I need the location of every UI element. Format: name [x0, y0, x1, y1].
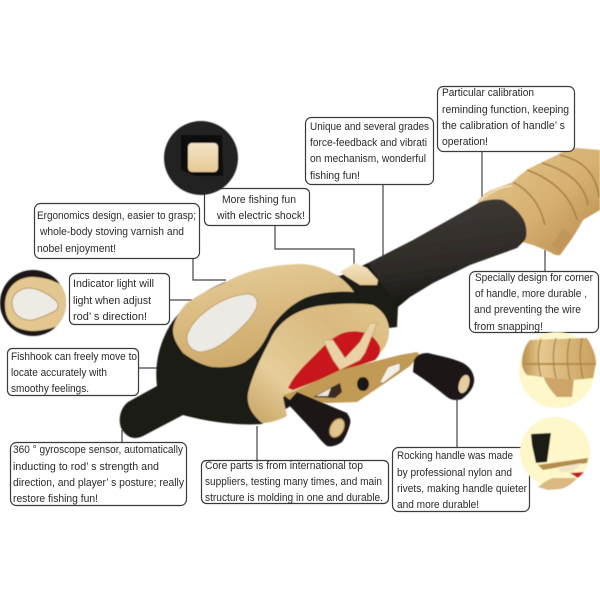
- crank arm black rivet: [357, 377, 369, 391]
- gold wedge on body: [340, 263, 378, 285]
- callout: fishhook: smoothy feelings.: [11, 383, 89, 395]
- callout: electric shock: [204, 188, 310, 226]
- callout: ergonomics: Ergonomics design, easier to grasp;: [37, 210, 196, 222]
- callout: calibration: operation!: [442, 136, 488, 148]
- reel body and tail rod: [120, 263, 398, 438]
- callout: force feedback: Unique and several grades: [310, 121, 429, 133]
- callout: gyroscope: inducting to rod’ s strength and: [13, 461, 159, 473]
- callout: calibration: the calibration of handle’ s: [442, 120, 565, 132]
- callout: indicator light: [70, 274, 170, 324]
- callout: core parts: structure is molding in one and durable.: [205, 492, 383, 504]
- callout: force feedback: force-feedback and vibrati: [310, 137, 427, 149]
- callout: calibration: [438, 86, 574, 152]
- callout: handle corner: [470, 272, 598, 333]
- red reel disc: [288, 331, 380, 390]
- inset: ribbed handle end: [519, 332, 596, 408]
- callout: handle corner: and preventing the wire: [474, 304, 581, 316]
- connector lines: [122, 151, 545, 460]
- gold crank arm: [283, 352, 420, 403]
- callout: electric shock: More fishing fun: [222, 194, 296, 206]
- callout: ergonomics: whole-body stoving varnish and: [39, 226, 184, 238]
- cream line guide: [323, 323, 377, 370]
- callout: fishhook: Fishhook can freely move to: [11, 351, 137, 363]
- callout: force feedback: on mechanism, wonderful: [310, 153, 426, 165]
- callout: ergonomics: nobel enjoyment!: [37, 243, 116, 255]
- callout: core parts: suppliers, testing many times, and main: [205, 476, 382, 488]
- callout: rocking handle: and more durable!: [397, 499, 479, 511]
- callout: force feedback: fishing fun!: [310, 170, 360, 182]
- gold ribbed rod end: [477, 148, 600, 255]
- callout: gyroscope: 360 ° gyroscope sensor, automatically: [13, 444, 183, 456]
- callout: rocking handle: [392, 448, 530, 512]
- left handle knob: [287, 392, 350, 446]
- fishing rod controller product illustration: [120, 148, 600, 446]
- crank arm slot left: [313, 383, 342, 398]
- callout: indicator light: rod’ s direction!: [73, 311, 147, 323]
- callout: force feedback: [306, 118, 434, 184]
- callout: ergonomics: [34, 204, 200, 258]
- callout: gyroscope: [10, 442, 186, 506]
- callout: rocking handle: Rocking handle was made: [397, 450, 513, 462]
- callout: calibration: Particular calibration: [442, 87, 534, 99]
- lower gold panel: [248, 304, 389, 423]
- callout: electric shock: with electric shock!: [216, 210, 305, 222]
- callout: core parts: [202, 460, 388, 504]
- callout: handle corner: of handle, more durable ,: [475, 288, 587, 300]
- callout: gyroscope: direction, and player’ s posture; really: [13, 477, 184, 489]
- callout: calibration: reminding function, keeping: [442, 104, 569, 116]
- callout: fishhook: locate accurately with: [11, 367, 107, 379]
- rod handle grip shaft: [368, 199, 526, 307]
- callout: indicator light: Indicator light will: [73, 278, 154, 290]
- callout: gyroscope: restore fishing fun!: [13, 493, 98, 505]
- callout: fishhook: [8, 348, 138, 396]
- crank arm white insert: [316, 388, 331, 396]
- callout: core parts: Core parts is from international top: [205, 460, 363, 472]
- crank arm slot right: [380, 363, 400, 383]
- callout: rocking handle: rivets, making handle quieter: [397, 483, 527, 495]
- upper gold panel: [173, 264, 354, 367]
- inset: indicator light: [0, 270, 70, 336]
- inset: rocking handle: [520, 417, 590, 490]
- right handle knob: [413, 353, 474, 400]
- inset: vibration button: [164, 121, 238, 195]
- callout: indicator light: light when adjust: [73, 295, 151, 307]
- white indicator light: [187, 294, 257, 352]
- callout: handle corner: from snapping!: [474, 321, 543, 333]
- callout: rocking handle: by professional nylon and: [397, 467, 512, 479]
